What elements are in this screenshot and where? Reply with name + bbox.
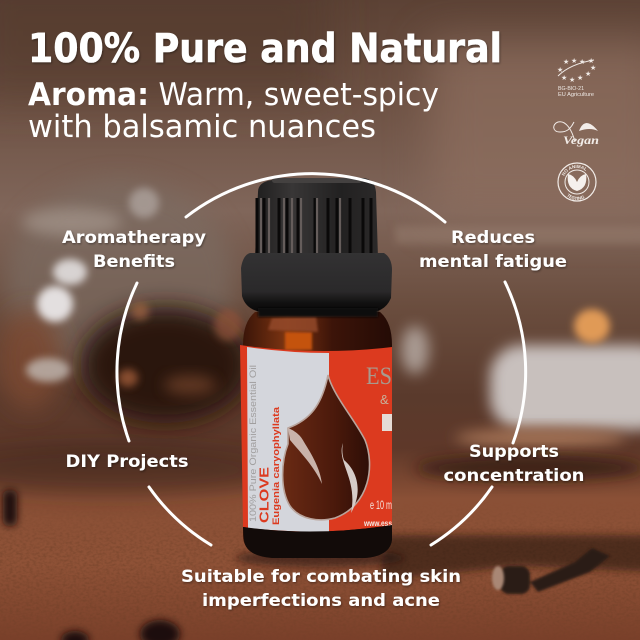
icon: EU organic leaf: ★ (577, 74, 583, 82)
subtitle: aroma (28, 77, 439, 145)
icon: EU organic leaf: ★ (571, 57, 577, 65)
label: aromatherapy benefits (62, 228, 206, 272)
subtitle: aroma: with balsamic nuances (28, 109, 376, 145)
subtitle: aroma: Aroma: Warm, sweet-spicy (28, 77, 439, 113)
bottle base (243, 525, 392, 558)
label brand text: www.ess (363, 518, 392, 528)
label: reduces mental fatigue: Reduces (451, 228, 535, 248)
label brand text: & (380, 392, 389, 407)
label: DIY projects: DIY Projects (66, 452, 188, 472)
neck shadow (258, 308, 378, 317)
icon: EU organic leaf: BG-BIO-21 (558, 86, 584, 92)
icon: vegan: Vegan (563, 133, 599, 147)
icon: no animal testing: TESTING (568, 194, 584, 200)
label: skin imperfections (181, 567, 461, 611)
label brand text (363, 363, 392, 528)
icon: EU organic leaf: ★ (590, 64, 596, 72)
icon: EU organic leaf: ★ (563, 58, 569, 66)
icon: EU organic leaf: ★ (561, 74, 567, 82)
bowl and candle at right (490, 345, 640, 430)
icon: EU organic leaf (557, 57, 596, 98)
label side text (248, 365, 282, 525)
icon: EU organic leaf: ★ (557, 66, 563, 74)
leather grain (0, 526, 640, 619)
bottle (240, 178, 392, 558)
icon: no animal testing (557, 162, 597, 202)
circle arcs (117, 174, 526, 545)
icon: no animal testing: NO ANIMAL (562, 164, 586, 176)
icon: EU organic leaf: ★ (569, 76, 575, 84)
label side text: Eugenia caryophyllata (271, 406, 282, 525)
screw cap (255, 178, 378, 258)
label: reduces mental fatigue: mental fatigue (419, 252, 567, 272)
bottle glass body (243, 312, 392, 558)
label side text: CLOVE (258, 467, 272, 523)
label brand text: e 10 m (370, 500, 392, 512)
glass jar at left (5, 180, 235, 380)
label: reduces mental fatigue (419, 228, 567, 272)
icon: EU organic leaf: ★ (585, 70, 591, 78)
title: 100% Pure and Natural (28, 26, 502, 72)
label: skin imperfections: imperfections and acne (202, 591, 440, 611)
label: skin imperfections: Suitable for combating skin (181, 567, 461, 587)
icon: EU organic leaf: ★ (579, 58, 585, 66)
icon: EU organic leaf: ★ (588, 57, 594, 65)
bottle shadow on leather (380, 535, 640, 580)
horizontal band (395, 226, 640, 244)
label: aromatherapy benefits: Benefits (93, 252, 175, 272)
cap collar (241, 253, 392, 312)
label brand text: ES (366, 363, 392, 390)
label: supports concentration (444, 442, 584, 486)
icon: EU organic leaf: EU Agriculture (558, 92, 594, 98)
label white panel (247, 347, 329, 532)
label side text: 100% Pure Organic Essential Oil (248, 365, 259, 522)
clove drop (283, 375, 370, 520)
label: supports concentration: concentration (444, 466, 584, 486)
label: supports concentration: Supports (469, 442, 559, 462)
blurred cloves (3, 490, 180, 640)
label red base (240, 345, 392, 532)
icon: vegan (554, 122, 599, 147)
label: aromatherapy benefits: Aromatherapy (62, 228, 206, 248)
